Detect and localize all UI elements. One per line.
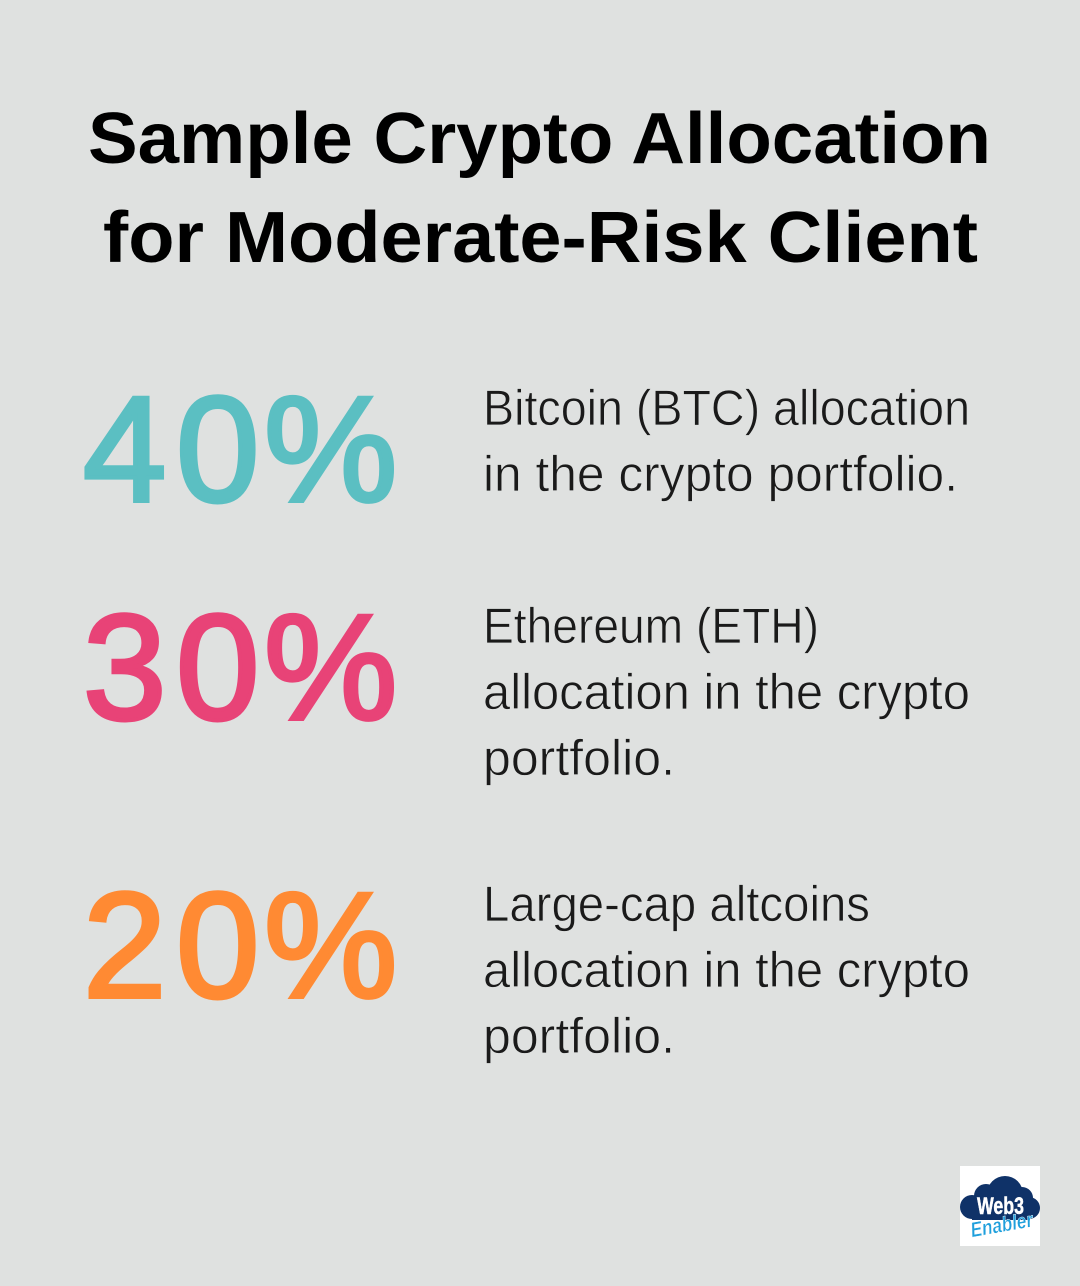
title: Sample Crypto Allocation [88, 99, 991, 179]
description: Ethereum: Ethereum (ETH) [483, 598, 819, 654]
description: Ethereum: allocation in the crypto [483, 664, 970, 720]
stat: 30% Ethereum [83, 583, 970, 786]
number: 20%: 20% [83, 861, 397, 1029]
description: Large-cap altcoins [483, 876, 970, 1064]
description: Large-cap altcoins: Large-cap altcoins [483, 876, 870, 932]
description: Bitcoin: in the crypto portfolio. [483, 446, 958, 502]
wordmark: Web3: Web3 [977, 1193, 1024, 1220]
number: 30%: 30% [83, 583, 397, 751]
description: Ethereum: portfolio. [483, 730, 675, 786]
title: for Moderate-Risk Client [103, 198, 978, 278]
wordmark: Enabler: Enabler [969, 1208, 1036, 1242]
description: Large-cap altcoins: allocation in the crypto [483, 942, 970, 998]
number: 40%: 40% [83, 365, 397, 533]
description: Bitcoin: Bitcoin (BTC) allocation [483, 380, 970, 436]
stat: 40% Bitcoin [83, 365, 970, 533]
stat: 20% Large-cap altcoins [83, 861, 970, 1064]
title [88, 99, 991, 278]
description: Ethereum [483, 598, 970, 786]
description: Bitcoin [483, 380, 970, 502]
icon: cloud [960, 1176, 1040, 1220]
description: Large-cap altcoins: portfolio. [483, 1008, 675, 1064]
logo: Web3 Enabler [960, 1166, 1040, 1246]
